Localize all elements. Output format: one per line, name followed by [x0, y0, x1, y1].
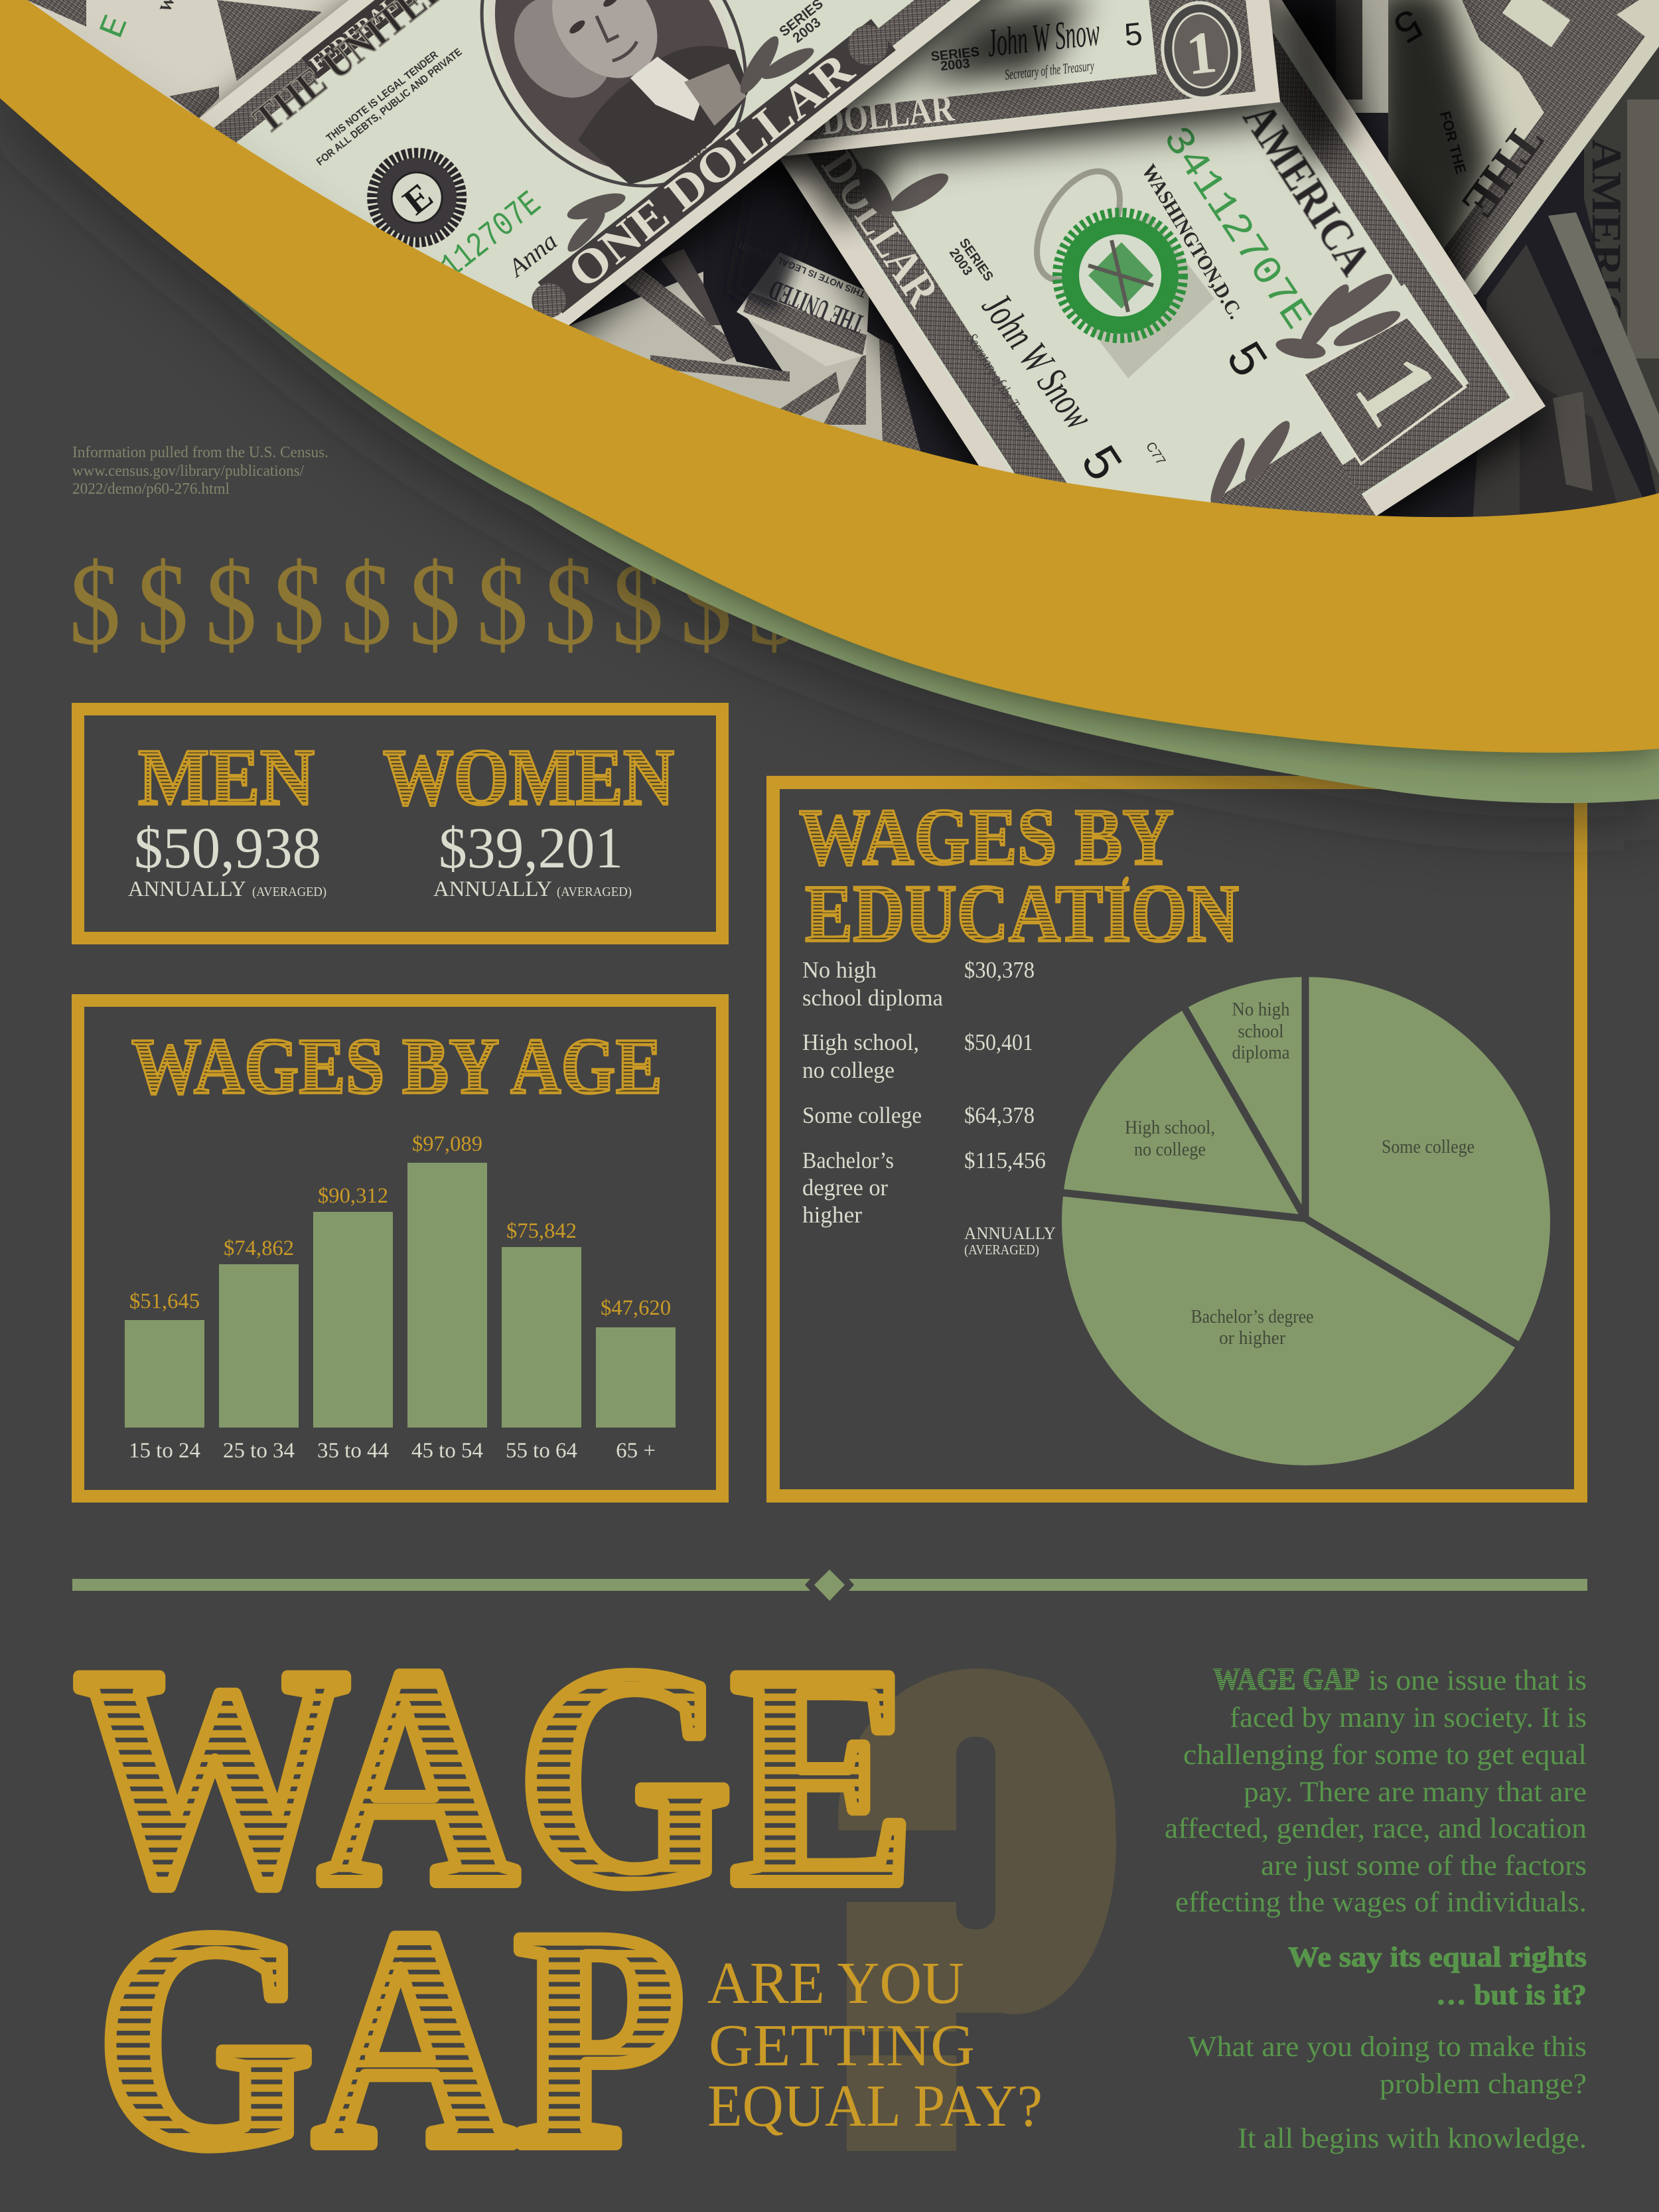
row of dollar signs: $	[273, 540, 325, 670]
text block: wage gap explanation: are just some of the factors	[1261, 1850, 1587, 1881]
heading: wages by age: WAGES BY AGE	[131, 1022, 662, 1111]
bar chart: $90,312	[318, 1184, 388, 1208]
serial number: 34112707E	[1153, 119, 1319, 338]
bill: upper right bill: FOR THE	[1437, 110, 1469, 176]
row of dollar signs: $	[748, 540, 800, 670]
bill: large central bill with green seal: DOLLAR	[812, 143, 949, 316]
heading: wages by education	[799, 792, 1239, 959]
women wage: $39,201	[439, 816, 623, 881]
bill: far right dim bill	[1584, 46, 1659, 494]
icon: laurel leaves	[538, 16, 824, 258]
panel: men and women wages	[78, 709, 722, 938]
series label: 2003	[946, 246, 975, 278]
education wage table: Bachelor’s	[802, 1147, 894, 1173]
row of dollar signs: $	[612, 540, 664, 670]
row of dollar signs: $	[409, 540, 461, 670]
subtitle: are you getting equal pay: ARE YOU	[707, 1951, 964, 2016]
portrait: Washington	[493, 0, 771, 207]
bill: Washington portrait bill: ONE DOLLAR	[557, 42, 863, 299]
bill: large central bill with green seal	[397, 0, 1546, 683]
bar chart: $47,620	[601, 1296, 671, 1320]
education wage table: $30,378	[964, 957, 1035, 983]
bill: upside-down bill in the gap: THIS NOTE IS LEGAL TENDER	[737, 240, 867, 300]
title: wage gap: WAGE	[75, 1603, 914, 1949]
signature: John W Snow	[974, 283, 1103, 438]
icon: federal reserve seal: E	[396, 175, 441, 223]
text block: wage gap explanation: affected, gender, race, and location	[1165, 1813, 1587, 1844]
portrait oval	[427, 0, 800, 238]
bill: large central bill with green seal: Secretary of the Treasury	[963, 331, 1041, 441]
text block: wage gap explanation: What are you doing to make this	[1188, 2031, 1587, 2063]
bar chart	[125, 1132, 676, 1463]
icon: corner one oval: 1	[1183, 19, 1220, 88]
row of dollar signs: $	[340, 540, 392, 670]
bar chart: 35 to 44	[317, 1439, 389, 1463]
divider with diamond	[72, 1570, 1587, 1601]
bar chart: 55 to 64	[506, 1439, 577, 1463]
pie chart: Bachelor’s degree	[1190, 1307, 1314, 1327]
source note: www.census.gov/library/publications/	[72, 463, 304, 480]
bar chart: $97,089	[412, 1132, 482, 1156]
education wage table: $115,456	[964, 1147, 1046, 1173]
education wage table: ANNUALLY	[964, 1224, 1056, 1243]
pie chart: diploma	[1232, 1043, 1290, 1063]
series label: SERIES	[956, 236, 996, 284]
bill: upper right bill: THE	[1451, 115, 1553, 228]
education wage table: (AVERAGED)	[964, 1242, 1039, 1258]
text block: wage gap explanation: … but is it?	[1436, 1980, 1587, 2011]
source note	[72, 444, 328, 498]
bill: Washington portrait bill: FOR ALL DEBTS, PUBLIC AND PRIVATE	[315, 46, 465, 168]
bill: lower right shadowed bill	[1473, 212, 1659, 524]
title: wage gap	[75, 1603, 914, 2211]
curved banner: gold layer	[0, 0, 1659, 753]
serial number: 112707E	[433, 184, 549, 287]
education wage table: High school,	[802, 1029, 919, 1055]
bill: top center bill with corner one: 2003	[940, 56, 971, 74]
ghost letter ornament	[1020, 157, 1214, 378]
bill: far right dim bill: AMERICA	[1583, 139, 1630, 358]
text block: wage gap explanation: WAGE GAP	[1213, 1662, 1360, 1697]
text block: wage gap explanation: is one issue that is	[1368, 1665, 1587, 1696]
text block: wage gap explanation	[1165, 1662, 1587, 2154]
top band	[203, 58, 317, 157]
subtitle: are you getting equal pay: EQUAL PAY?	[707, 2073, 1043, 2139]
bill: top left bill behind	[0, 0, 504, 265]
bar chart: 15 to 24	[129, 1439, 200, 1463]
icon: green treasury seal	[1057, 212, 1183, 338]
bill: large central bill with green seal: AMERICA	[1233, 95, 1381, 284]
bill: top center bill with corner one: 5	[1123, 17, 1144, 53]
bill: large central bill with green seal: C77	[1143, 439, 1168, 468]
small signature: Anna	[502, 227, 563, 283]
icon: corner one oval	[1158, 0, 1244, 102]
pie chart	[1055, 969, 1550, 1465]
ornament: corner one	[1303, 317, 1465, 464]
text block: wage gap explanation: pay. There are many that are	[1244, 1777, 1587, 1808]
curved banner: green layer	[0, 44, 1659, 803]
bar chart: 45 to 54	[411, 1439, 483, 1463]
pie chart: school	[1238, 1021, 1284, 1042]
row of dollar signs: $	[680, 540, 732, 670]
bill: upside-down bill in the gap	[737, 242, 869, 366]
panel: wages by age	[78, 1001, 722, 1496]
bill: top center bill with corner one: Secretary of the Treasury	[1004, 57, 1095, 83]
pie chart: Some college	[1382, 1137, 1475, 1157]
bar chart: $51,645	[129, 1290, 200, 1313]
source note: Information pulled from the U.S. Census.	[72, 444, 328, 461]
text block: wage gap explanation: It all begins with knowledge.	[1238, 2123, 1587, 2154]
text block: wage gap explanation: problem change?	[1380, 2069, 1587, 2100]
bill: upside-down bill in the gap: THE UNITED	[764, 274, 869, 339]
education wage table: Some college	[802, 1102, 922, 1128]
text block: wage gap explanation: We say its equal rights	[1288, 1942, 1587, 1973]
bar chart: 65 +	[616, 1439, 656, 1463]
text block: wage gap explanation: challenging for some to get equal	[1183, 1739, 1587, 1771]
heading: wages by education: WAGES BY	[799, 792, 1174, 882]
legal tender text: THIS NOTE IS LEGAL TENDER	[325, 49, 441, 144]
education wage table: no college	[802, 1057, 895, 1083]
bill: top center bill with corner one: DOLLAR	[820, 86, 956, 143]
pie chart: no college	[1134, 1140, 1206, 1160]
photo: pile of one dollar bills	[27, 0, 1659, 518]
row of dollar signs	[69, 540, 800, 670]
bill: top center bill with corner one	[748, 0, 1280, 158]
bill: upper right bill: 5	[1386, 0, 1430, 53]
row of dollar signs: $	[544, 540, 596, 670]
source note: 2022/demo/p60-276.html	[72, 480, 230, 498]
row of dollar signs: $	[69, 540, 121, 670]
men wage: $50,938	[134, 816, 321, 881]
bar chart: $75,842	[506, 1219, 577, 1243]
heading: wages by education: EDUCATION	[805, 868, 1239, 959]
education wage table: $64,378	[964, 1102, 1035, 1128]
education wage table	[802, 957, 1056, 1258]
bill: large central bill with green seal: 5	[1070, 436, 1133, 490]
women wage: ANNUALLY	[433, 877, 552, 901]
bill: top center bill with corner one: John W Snow	[985, 10, 1102, 65]
band: one dollar	[538, 19, 896, 313]
education wage table: No high	[802, 957, 877, 983]
row of dollar signs: $	[137, 540, 188, 670]
subtitle: are you getting equal pay: GETTING	[709, 2013, 975, 2079]
education wage table: school diploma	[802, 985, 943, 1011]
bill: large central bill with green seal: 5	[1216, 332, 1278, 386]
heading: women: WOMEN	[383, 733, 674, 822]
icon: laurel leaves	[852, 163, 1404, 508]
bill: top center bill with corner one: SERIES	[930, 44, 980, 64]
subtitle: are you getting equal pay	[707, 1951, 1043, 2139]
bill: Washington portrait bill: 2003	[790, 15, 824, 46]
panel: wages by education	[773, 782, 1581, 1496]
women wage: (AVERAGED)	[557, 885, 632, 899]
text block: wage gap explanation: effecting the wages of individuals.	[1175, 1887, 1587, 1918]
bill: upper right bill	[1388, 0, 1659, 295]
row of dollar signs: $	[476, 540, 528, 670]
men wage: ANNUALLY	[128, 877, 246, 901]
bar chart: $74,862	[224, 1236, 294, 1260]
bar chart: 25 to 34	[223, 1439, 295, 1463]
shadow: curved banner on background	[0, 54, 1659, 818]
icon: federal reserve seal	[355, 136, 478, 259]
bill: narrow strip between bills	[1336, 0, 1388, 113]
bill: large central bill with green seal: 1	[1331, 334, 1463, 446]
pie chart: No high	[1232, 999, 1290, 1020]
text: Washington D.C.: WASHINGTON,D.C.	[1137, 160, 1248, 323]
pie chart: or higher	[1219, 1328, 1286, 1349]
text block: wage gap explanation: faced by many in society. It is	[1230, 1702, 1587, 1733]
education wage table: higher	[802, 1202, 862, 1228]
education wage table: degree or	[802, 1175, 888, 1201]
men wage: (AVERAGED)	[252, 885, 326, 899]
bill: lower left bills under stack	[571, 249, 921, 451]
bill: Washington portrait bill: WASHINGTON	[665, 132, 729, 186]
bill: Washington portrait bill	[127, 0, 1094, 482]
pie chart: High school,	[1125, 1118, 1215, 1138]
title: wage gap: GAP	[97, 1865, 685, 2211]
education wage table: $50,401	[964, 1029, 1033, 1055]
heading: men: MEN	[138, 733, 315, 822]
row of dollar signs: $	[205, 540, 257, 670]
